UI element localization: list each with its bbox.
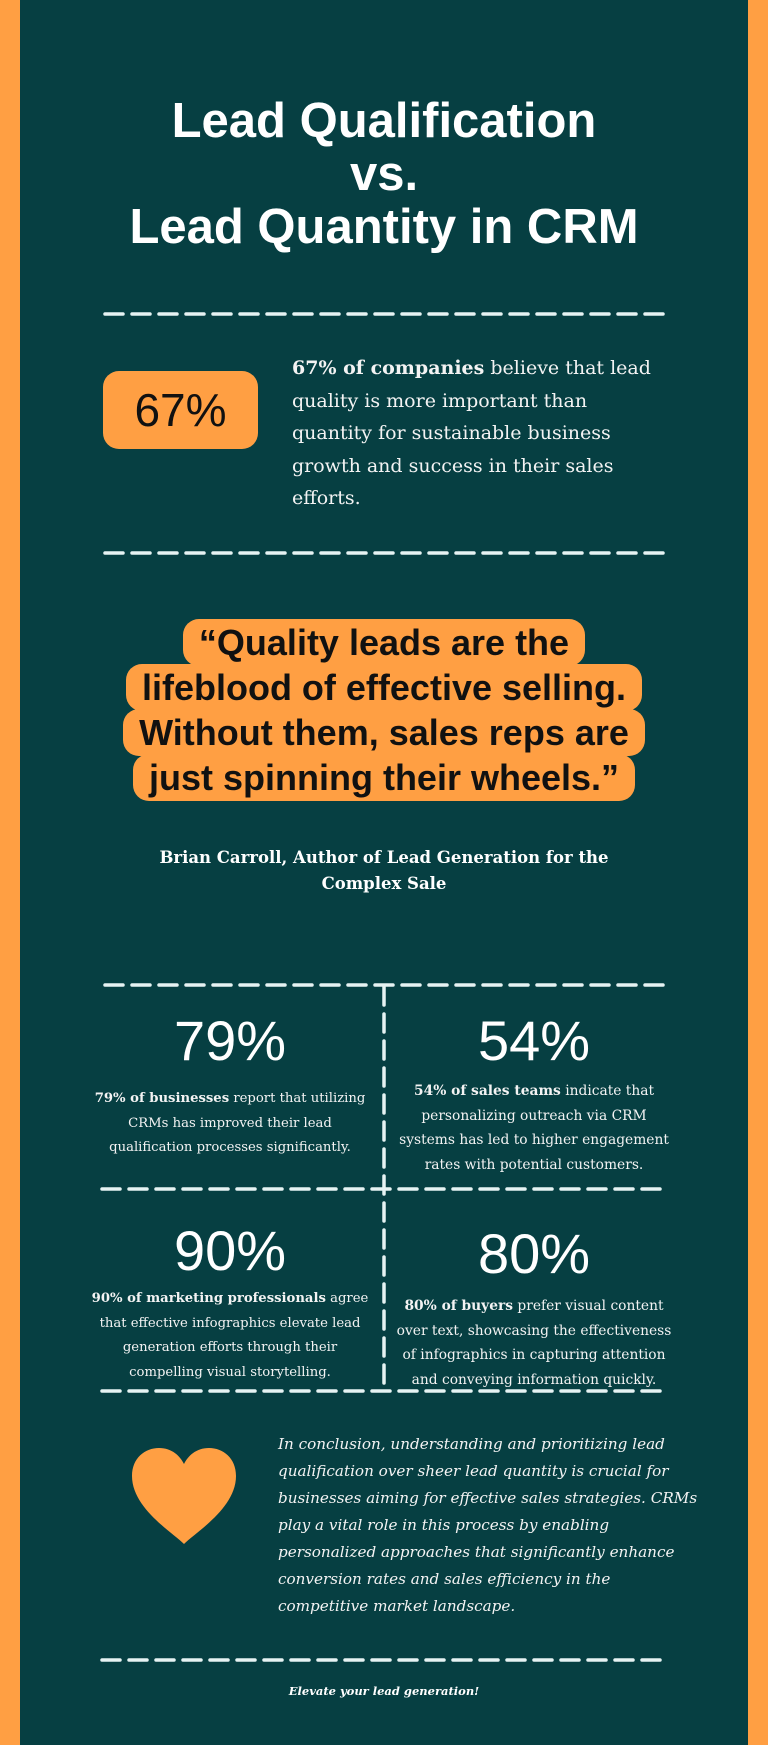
stat: 80%: over text, showcasing the effectiveness: [397, 1322, 671, 1338]
conclusion text: businesses aiming for effective sales strategies. CRMs: [278, 1489, 697, 1507]
stat: 90%: [92, 1219, 368, 1380]
stat: 79%: 79% of businesses report that utilizing: [95, 1091, 365, 1106]
stat: 90%: 90% of marketing professionals agree: [92, 1291, 368, 1306]
stat: 54%: rates with potential customers.: [425, 1156, 643, 1172]
stat: 54%: 54% of sales teams indicate that: [414, 1083, 654, 1099]
title: vs.: [350, 147, 418, 201]
quote callout: “Quality leads are the: [199, 622, 569, 663]
stat: 90%: generation efforts through their: [123, 1340, 337, 1355]
stat: 79%: CRMs has improved their lead: [128, 1116, 332, 1130]
stat: 54%: [399, 1009, 669, 1172]
quote callout: just spinning their wheels.”: [149, 757, 619, 798]
stat: 54%: personalizing outreach via CRM: [421, 1108, 647, 1124]
stat: 90%: that effective infographics elevate lead: [100, 1316, 360, 1330]
stat box: 67%: [103, 371, 258, 449]
conclusion text: qualification over sheer lead quantity is crucial for: [278, 1462, 669, 1480]
stat: 54%: 54%: [478, 1009, 590, 1072]
conclusion text: In conclusion, understanding and prioritizing lead: [278, 1435, 665, 1453]
stat: 80%: 80%: [478, 1222, 590, 1285]
stat: 54%: systems has led to higher engagement: [399, 1132, 669, 1148]
quote callout: lifeblood of effective selling.: [142, 667, 626, 708]
title: Lead Qualification: [172, 94, 596, 148]
footer tagline: Elevate your lead generation!: [289, 1684, 479, 1698]
stat: 79%: qualification processes significantly.: [109, 1140, 351, 1155]
quote attribution: Brian Carroll, Author of Lead Generation for the Complex Sale: [159, 848, 609, 893]
conclusion text: play a vital role in this process by enabling: [278, 1516, 609, 1534]
quote callout: Without them, sales reps are: [139, 712, 629, 753]
conclusion text: [278, 1435, 697, 1615]
text: 67% description: 67% of companies believe that lead quality is more important than quantity for sustainable business growth and success in their sales efforts.: [292, 357, 651, 509]
stat: 80%: [397, 1222, 671, 1388]
stat: 90%: compelling visual storytelling.: [129, 1364, 331, 1380]
conclusion text: conversion rates and sales efficiency in the: [278, 1570, 610, 1588]
conclusion text: competitive market landscape.: [278, 1597, 515, 1615]
stat: 80%: 80% of buyers prefer visual content: [404, 1298, 664, 1314]
title: Lead Quantity in CRM: [129, 200, 639, 254]
conclusion text: personalized approaches that significantly enhance: [278, 1543, 674, 1561]
icon: heart: [132, 1448, 236, 1544]
stat box: 67%: 67%: [134, 384, 227, 436]
stat: 80%: of infographics in capturing attention: [402, 1347, 666, 1363]
title: [129, 94, 639, 254]
stat: 79%: 79%: [174, 1009, 286, 1072]
quote callout: [123, 619, 645, 801]
stat: 90%: 90%: [174, 1219, 286, 1282]
stat: 80%: and conveying information quickly.: [412, 1372, 656, 1388]
stat: 79%: [95, 1009, 365, 1155]
